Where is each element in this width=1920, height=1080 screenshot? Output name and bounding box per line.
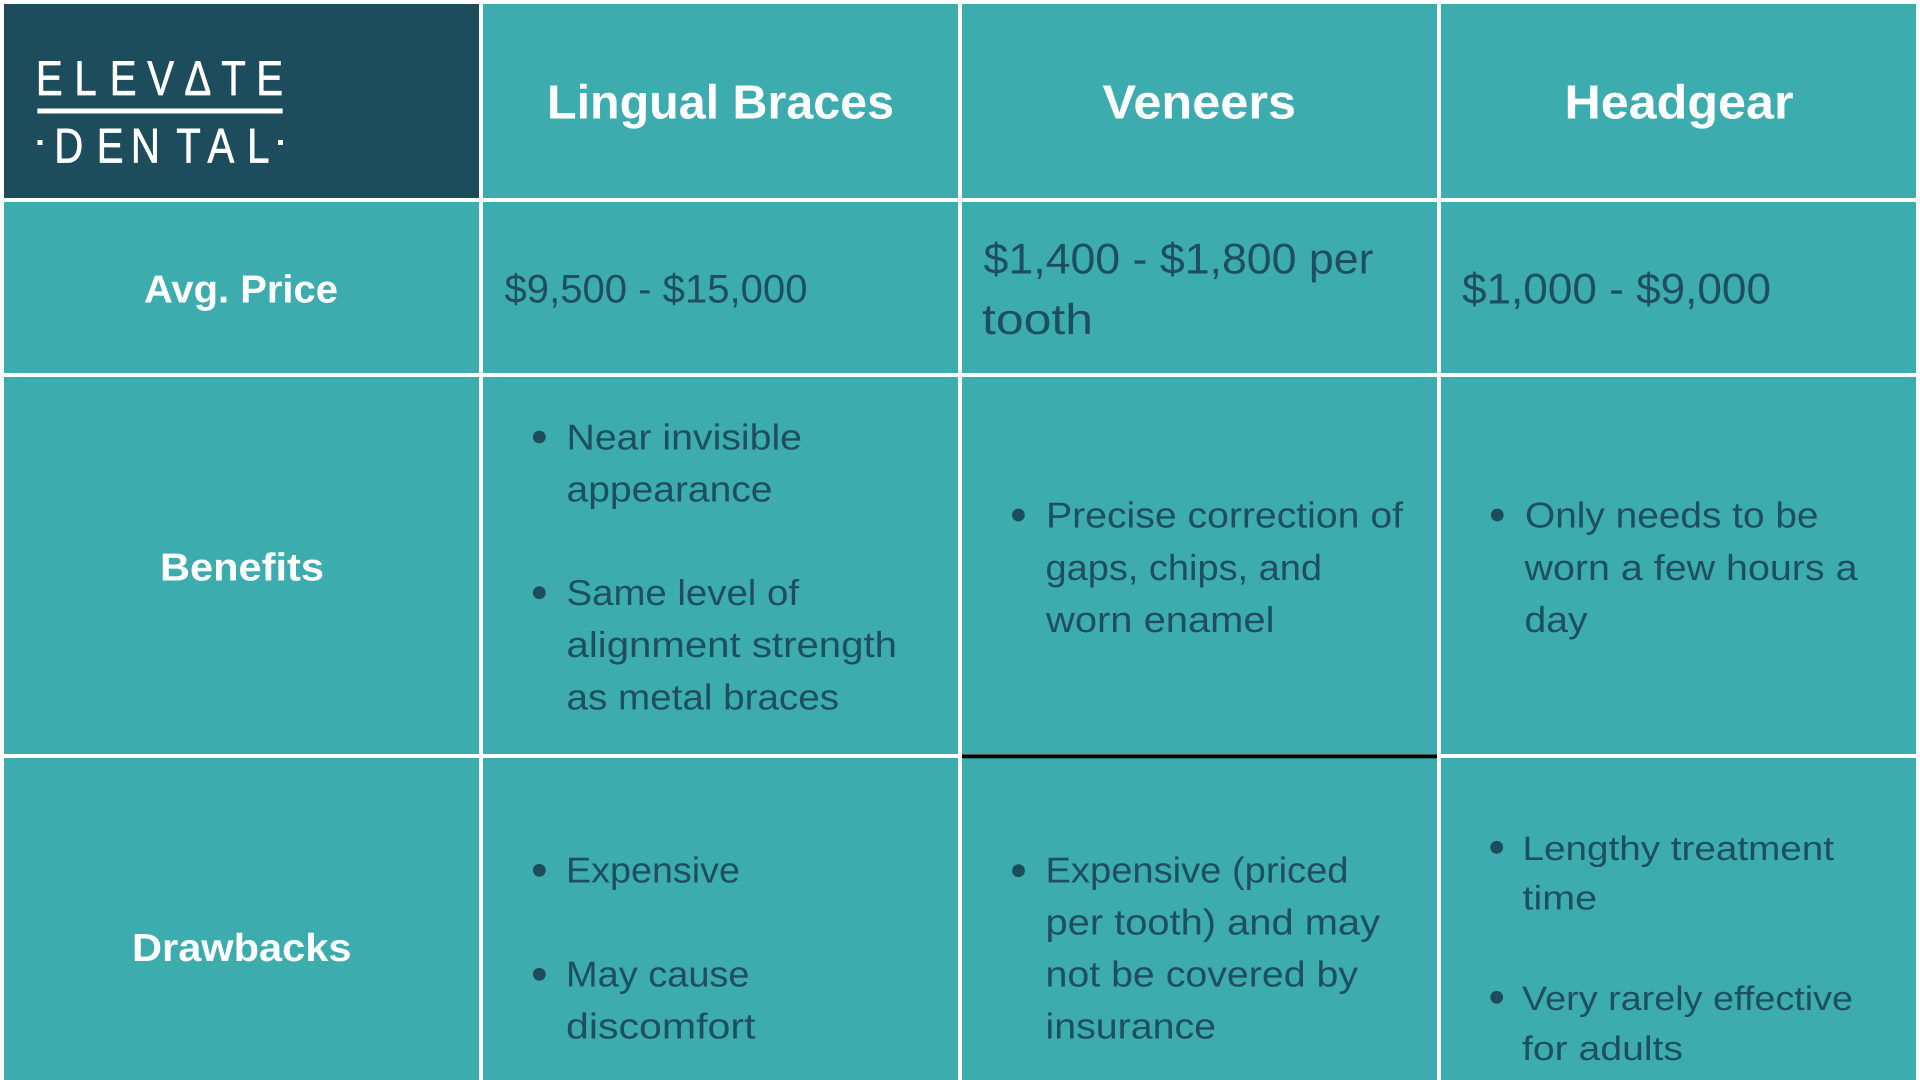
panel: Veneers price	[962, 202, 1437, 373]
panel: Headgear price	[1441, 202, 1916, 373]
panel: Headgear benefits	[1441, 377, 1916, 754]
logo wordmark: ELEVATE: ELEVΔTE	[36, 52, 283, 106]
bullet: same level of alignment strength	[533, 572, 897, 717]
price: Veneers	[982, 235, 1374, 344]
bullet: near invisible appearance: Near invisible	[566, 416, 802, 457]
bullet: precise correction: worn enamel	[1045, 599, 1274, 640]
heading: Lingual Braces: Lingual Braces	[547, 77, 894, 130]
bullet: only needs to be worn	[1491, 495, 1859, 640]
price: Veneers: $1,400 - $1,800 per	[984, 235, 1374, 283]
bullet: same level of alignment strength: alignment strength	[566, 624, 897, 665]
bullet: expensive, insurance: per tooth) and may	[1046, 901, 1380, 942]
price: Lingual Braces: $9,500 - $15,000	[504, 268, 808, 312]
logo bar	[37, 108, 283, 114]
bullet: precise correction	[1012, 495, 1404, 640]
logo dots	[38, 140, 283, 145]
panel: logo	[4, 4, 479, 198]
heading: Veneers: Veneers	[1102, 77, 1296, 130]
panel: Benefits label	[4, 377, 479, 754]
bullet: expensive, insurance	[1012, 849, 1380, 1046]
bullet: near invisible appearance	[533, 416, 802, 509]
bullet: expensive, insurance: not be covered by	[1046, 953, 1358, 994]
bullet: expensive, insurance: Expensive (priced	[1046, 849, 1348, 890]
panel: Lingual Braces drawbacks	[483, 758, 958, 1080]
panel: Avg. Price label	[4, 202, 479, 373]
bullet: may cause discomfort: discomfort	[566, 1006, 756, 1047]
bullet: expensive, insurance: insurance	[1046, 1005, 1216, 1046]
panel: Drawbacks label	[4, 758, 479, 1080]
bullet: only needs to be worn: Only needs to be	[1525, 495, 1818, 536]
panel: Lingual Braces benefits	[483, 377, 958, 754]
bullet: rarely effective for adults	[1490, 980, 1853, 1068]
panel: Headgear header	[1441, 4, 1916, 198]
bullet: only needs to be worn: day	[1524, 599, 1588, 640]
price: Headgear: $1,000 - $9,000	[1462, 266, 1771, 314]
bullet: lengthy treatment time	[1490, 830, 1835, 918]
heading: Headgear: Headgear	[1564, 77, 1794, 130]
bullet: rarely effective for adults: for adults	[1522, 1030, 1683, 1068]
logo wordmark: DENTAL: DENTAL	[54, 119, 269, 173]
black divider under Veneers benefits	[962, 754, 1437, 758]
bullet: lengthy treatment time: time	[1522, 880, 1597, 918]
panel: Veneers benefits	[962, 377, 1437, 754]
logo: Elevate Dental	[36, 52, 283, 173]
panel: Headgear drawbacks	[1441, 758, 1916, 1080]
bullet: only needs to be worn: worn a few hours a	[1523, 547, 1859, 588]
row label: Benefits: Benefits	[160, 547, 324, 590]
bullet: same level of alignment strength: Same level of	[566, 572, 800, 613]
bullet: same level of alignment strength: as metal braces	[566, 676, 839, 717]
bullet: may cause discomfort	[533, 954, 756, 1047]
bullet: may cause discomfort: May cause	[566, 954, 750, 995]
bullet: precise correction: gaps, chips, and	[1046, 547, 1322, 588]
row label: Drawbacks: Drawbacks	[132, 927, 352, 970]
bullet: lengthy treatment time: Lengthy treatment	[1522, 830, 1835, 868]
bullet: precise correction: Precise correction of	[1046, 495, 1404, 536]
row label: Avg. Price: Avg. Price	[144, 269, 338, 312]
panel: Veneers header	[962, 4, 1437, 198]
bullet: rarely effective for adults: Very rarely effective	[1522, 980, 1853, 1018]
bullet: near invisible appearance: appearance	[566, 468, 772, 509]
panel: Veneers drawbacks	[962, 758, 1437, 1080]
bullet: expensive: Expensive	[566, 849, 740, 890]
panel: Lingual Braces price	[483, 202, 958, 373]
price: Veneers: tooth	[982, 296, 1093, 344]
panel: Lingual Braces header	[483, 4, 958, 198]
